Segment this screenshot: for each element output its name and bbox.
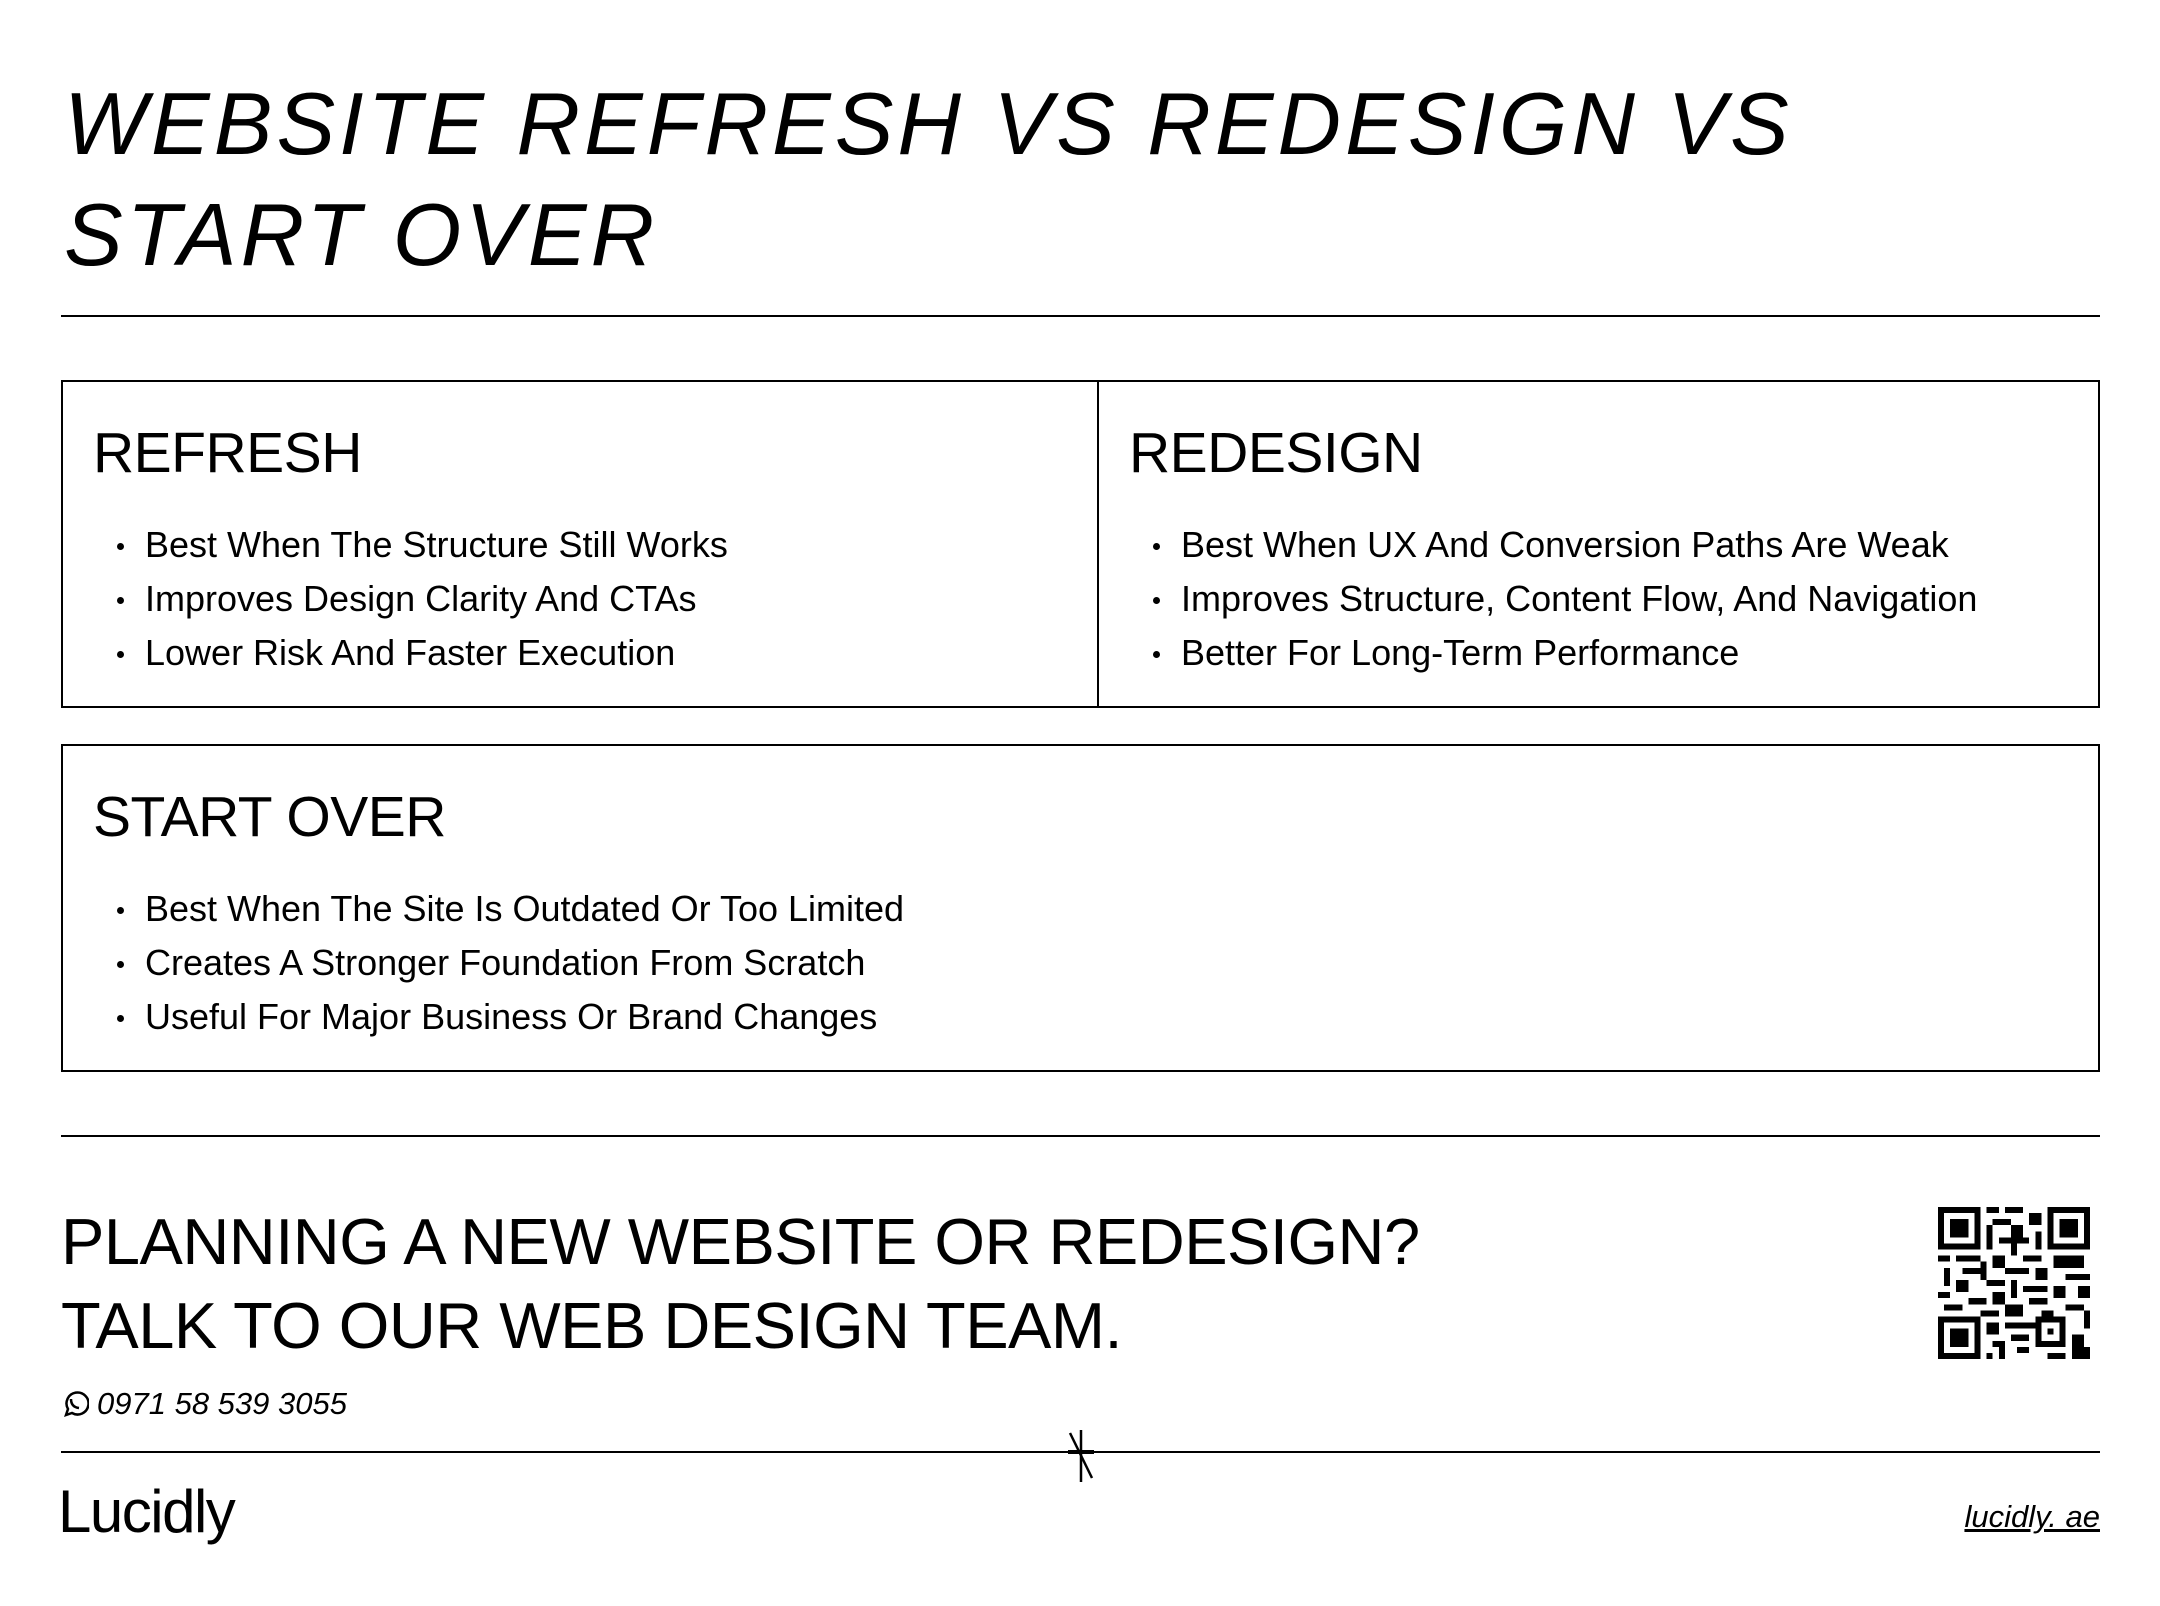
heading: refresh: REFRESH (93, 421, 362, 485)
list: redesign: Improves Structure, Content Flow, And Navigation (1181, 578, 1977, 619)
heading: start over: START OVER (93, 785, 446, 849)
list: refresh: Best When The Structure Still Works (145, 524, 728, 565)
list: redesign (1153, 524, 1977, 673)
cta text: PLANNING A NEW WEBSITE OR REDESIGN? (61, 1205, 1420, 1278)
website link: lucidly. ae (1964, 1499, 2100, 1534)
panel: refresh and redesign (61, 380, 2100, 708)
title: START OVER (64, 185, 658, 284)
icon: sparkle star (1068, 1430, 1094, 1482)
heading: redesign: REDESIGN (1129, 421, 1423, 485)
list: refresh: Lower Risk And Faster Execution (145, 632, 675, 673)
logo: Lucidly (58, 1478, 234, 1545)
list: start over: Best When The Site Is Outdated Or Too Limited (145, 888, 904, 929)
qr code (1938, 1207, 2090, 1359)
panel: start over (61, 744, 2100, 1072)
list: start over: Useful For Major Business Or Brand Changes (145, 996, 877, 1037)
title: WEBSITE REFRESH VS REDESIGN VS (64, 74, 1793, 173)
cta text (61, 1205, 1420, 1362)
title (64, 74, 1793, 284)
list: refresh (117, 524, 728, 673)
list: redesign: Better For Long-Term Performance (1181, 632, 1739, 673)
list: redesign: Best When UX And Conversion Paths Are Weak (1181, 524, 1949, 565)
phone: 0971 58 539 3055 (97, 1386, 347, 1421)
list: start over: Creates A Stronger Foundation From Scratch (145, 942, 865, 983)
cta text: TALK TO OUR WEB DESIGN TEAM. (61, 1289, 1122, 1362)
list: refresh: Improves Design Clarity And CTAs (145, 578, 697, 619)
list: start over (117, 888, 904, 1037)
icon: whatsapp (64, 1391, 89, 1417)
